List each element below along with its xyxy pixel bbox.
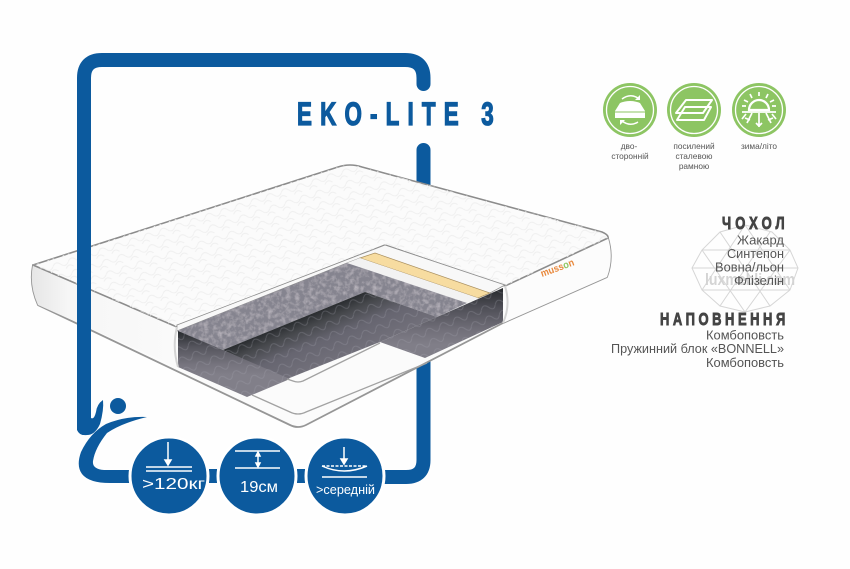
feature label: steel frame: рамною <box>679 161 709 171</box>
text block: cover <box>715 214 785 288</box>
text block: filling <box>611 310 785 370</box>
firmness value: >середній <box>316 483 375 497</box>
mattress logo: mussоn <box>539 258 576 280</box>
right side panel <box>503 238 611 323</box>
cut edges <box>175 286 508 367</box>
figure swoosh <box>79 417 147 483</box>
mattress body base <box>32 238 611 427</box>
text block: cover: Жакард <box>737 234 785 248</box>
figure leg <box>77 400 103 435</box>
title: EKO-LITE 3 <box>297 96 494 132</box>
logo figure <box>77 398 147 483</box>
flip arrows <box>622 96 638 124</box>
height icon <box>235 451 280 468</box>
horizon <box>742 111 776 113</box>
watermark <box>692 225 798 312</box>
feature label: steel frame: сталевою <box>675 151 713 161</box>
figure head <box>110 398 126 414</box>
text block: cover: Вовна/льон <box>715 260 784 274</box>
badge: load <box>130 437 208 515</box>
top quilted surface <box>33 165 608 327</box>
feature label: two-sided: дво- <box>621 141 637 151</box>
sun half <box>749 100 769 110</box>
feature label: steel frame <box>673 141 715 171</box>
frame pictogram <box>676 100 712 120</box>
badge: height <box>218 437 296 515</box>
left side panel <box>32 265 177 367</box>
right frame stroke behind mattress <box>380 150 424 477</box>
frame bridges <box>209 469 305 483</box>
white layer under yellow <box>347 258 478 303</box>
mattress pictogram <box>615 101 645 118</box>
snowflakes half <box>742 113 776 127</box>
feature label: winter summer: зима/літо <box>741 141 777 151</box>
spring block centre <box>223 292 437 379</box>
feature icon: winter summer <box>732 83 786 137</box>
watermark text: luxmebli.com <box>705 270 795 289</box>
right cut wall <box>380 288 503 358</box>
cover heading: ЧОХОЛ <box>722 214 785 234</box>
height value: 19см <box>240 479 278 496</box>
blue frame stroke top and left <box>84 60 424 428</box>
mattress <box>32 165 611 427</box>
feature label: steel frame: посилений <box>673 141 715 151</box>
left cut wall <box>178 331 290 397</box>
cutaway top white layer <box>177 245 505 331</box>
feature icon: two-sided <box>603 83 657 137</box>
grey felt top layer <box>177 263 467 350</box>
load icon <box>146 442 192 471</box>
badge: firmness <box>306 437 384 515</box>
text block: cover: Флізелін <box>734 274 784 288</box>
load value: >120кг <box>142 476 205 493</box>
filling heading: НАПОВНЕННЯ <box>660 310 785 330</box>
text block: filling: Пружинний блок «BONNELL» <box>611 342 784 356</box>
firmness icon <box>322 447 367 477</box>
feature label: two-sided: сторонній <box>611 151 649 161</box>
feature icon: steel frame <box>667 83 721 137</box>
feature label: two-sided <box>611 141 649 161</box>
text block: filling: Комбоповсть <box>706 328 784 342</box>
text block: filling: Комбоповсть <box>706 356 784 370</box>
latex yellow layer <box>360 253 490 298</box>
text block: cover: Синтепон <box>727 247 784 261</box>
bottom white board lines <box>252 343 427 414</box>
